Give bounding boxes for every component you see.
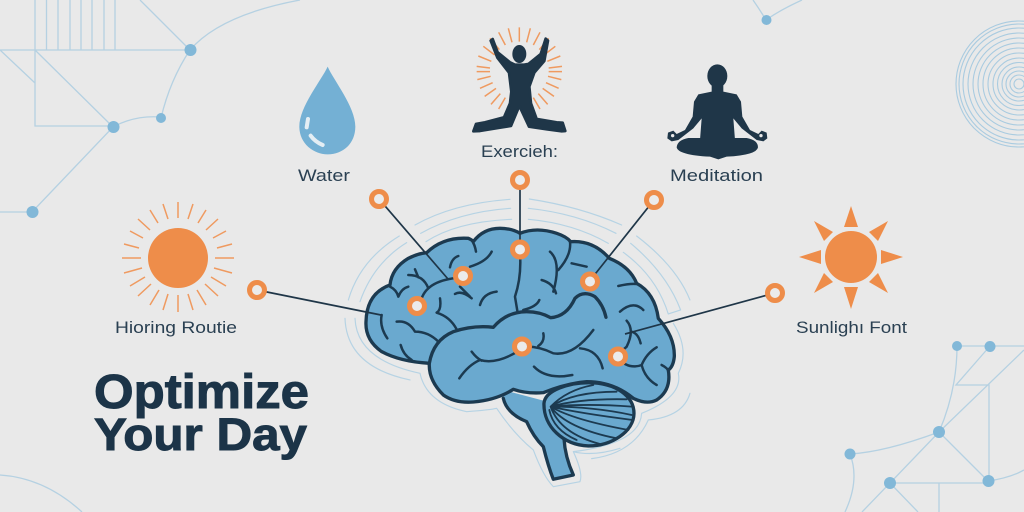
icon: triangle sun: [799, 206, 903, 309]
brainstem: [503, 390, 573, 479]
label: exercise: Exercieh:: [481, 142, 558, 161]
cerebellum: [544, 383, 634, 446]
network: top left: [0, 0, 300, 218]
network: bottom right: [844, 341, 1024, 512]
cerebrum: [366, 228, 674, 403]
temporal lobe: [429, 294, 633, 402]
icon: exercise figure with rays: [473, 27, 565, 131]
title: Optimize: [94, 366, 309, 419]
title: Your Day: [94, 409, 307, 460]
icon: water drop: [299, 67, 355, 154]
brain sulci: [381, 240, 668, 385]
network: top right: [753, 0, 802, 25]
brain: [345, 199, 690, 487]
connection pins: [250, 172, 782, 364]
icon: rayed sun: [122, 202, 234, 312]
label: sunlight font: Sunlighı Font: [796, 318, 907, 337]
label: water: Water: [298, 166, 350, 185]
leader lines: [257, 180, 775, 334]
label: meditation: Meditation: [670, 166, 763, 185]
network: bottom left curve: [0, 475, 82, 512]
brain halo lines: [345, 199, 690, 487]
concentric circles: [956, 21, 1024, 147]
label: hioring routie: Hioring Routie: [115, 318, 237, 337]
icon: meditation figure: [667, 64, 767, 159]
title: [94, 366, 309, 460]
